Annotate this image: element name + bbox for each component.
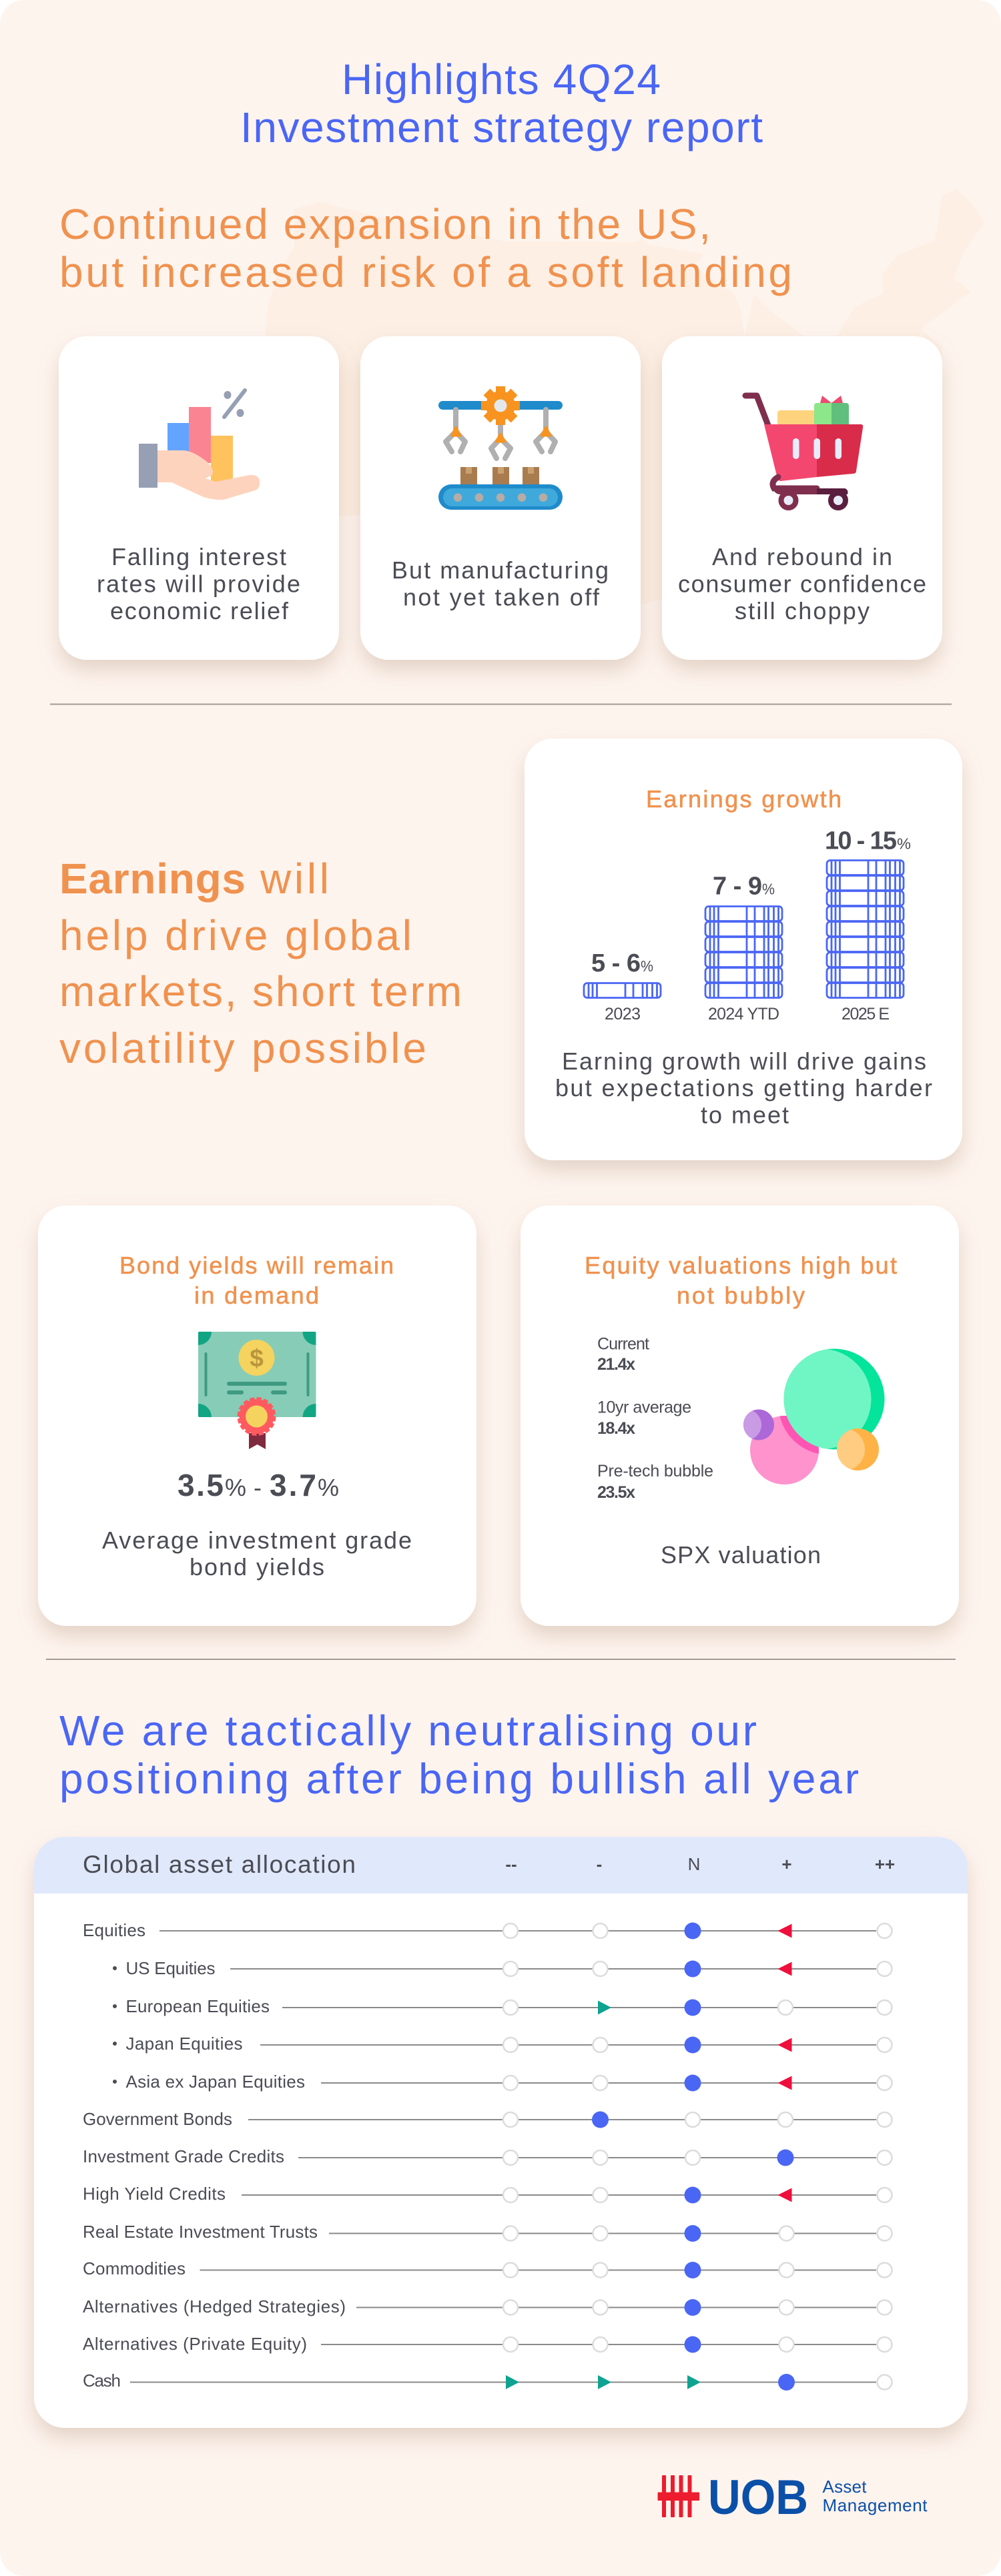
table header: ++ [875,1854,895,1874]
row labels: Government Bonds [83,2109,232,2129]
title [240,55,763,151]
legend: valuation multiples: 10yr average [597,1398,691,1417]
text: average investment grade bond yields [102,1527,412,1581]
text: manufacturing: not yet taken off [403,583,600,611]
row labels: US Equities [125,1958,215,1978]
row labels: Alternatives (Hedged Strategies) [83,2296,346,2316]
row labels: European Equities [125,1996,270,2016]
title: Highlights 4Q24 [342,55,661,103]
bar: 2024 YTD: 7 - 9 [713,873,762,901]
heading: earnings [59,855,462,1072]
legend: valuation multiples: 21.4x [597,1355,635,1374]
text: consumer confidence: still choppy [735,597,870,624]
panel heading: not bubbly [677,1282,805,1309]
heading: earnings: help drive global [59,911,412,959]
table header: - [597,1854,602,1874]
row labels: Commodities [83,2258,186,2278]
panel: consumer confidence [662,336,942,660]
table header: + [781,1854,792,1874]
background map: United States silhouette [266,189,985,604]
row labels: Cash [83,2371,121,2391]
value: 3.5% - 3.7% [178,1468,339,1502]
bar: 2024 YTD [705,873,782,1023]
panel heading [119,1252,394,1309]
table header: Global asset allocation [83,1851,356,1878]
panel: falling interest rates [59,336,339,660]
row labels: Real Estate Investment Trusts [83,2222,318,2242]
row labels: Asia ex Japan Equities [125,2072,305,2092]
bar: 2024 YTD: 2024 YTD [708,1005,779,1023]
value: 3.5% - 3.7%: % [225,1474,246,1501]
logo: UOB Asset Management: Management [822,2495,928,2515]
value: 3.5% - 3.7%: - [254,1474,262,1501]
text: falling interest rates: Falling interest [111,543,286,570]
chart: stacked coins [584,827,911,1023]
heading: US expansion: Continued expansion in the US, [59,200,711,248]
icon: hand holding bar chart [139,390,260,500]
bar: 2025 E: 2025 E [842,1005,890,1023]
heading: tactically neutralising: positioning after being bullish all year [59,1755,859,1803]
heading: earnings: markets, short term [59,967,462,1015]
text: earnings description: Earning growth will drive gains [562,1047,926,1075]
row labels: High Yield Credits [83,2184,226,2204]
panel heading: Equity valuations high but [585,1252,897,1279]
text: earnings description [555,1047,932,1129]
value: 3.5% - 3.7%: % [318,1474,339,1501]
panel: manufacturing [360,336,641,660]
heading: US expansion: but increased risk of a soft landing [59,248,792,296]
row labels: Japan Equities [125,2034,243,2054]
bar: 2023: 2023 [605,1005,641,1023]
heading: earnings: Earnings [59,855,246,903]
text: falling interest rates [97,543,300,624]
heading: earnings: will [260,855,329,903]
table header: -- [505,1854,517,1874]
text: earnings description: but expectations getting harder [555,1074,932,1102]
text: earnings description: to meet [701,1101,789,1129]
legend: valuation multiples [597,1334,713,1502]
value: 3.5% - 3.7%: 3.7 [270,1468,316,1502]
text: falling interest rates: rates will provide [97,570,300,598]
legend: valuation multiples: Current [597,1334,649,1353]
title: Investment strategy report [240,103,763,151]
row labels: Equities [83,1920,145,1940]
panel heading: Earnings growth [646,785,842,813]
table header [34,1837,968,1893]
bar: 2023: 5 - 6 [591,949,641,977]
value: 3.5% - 3.7%: 3.5 [178,1468,224,1502]
text: average investment grade bond yields: Average investment grade [102,1527,412,1554]
icon: bond certificate: $ [250,1344,264,1372]
text: manufacturing: But manufacturing [392,556,609,584]
panel: global asset allocation [34,1837,968,2428]
text: consumer confidence: And rebound in [712,543,892,570]
heading: tactically neutralising: We are tactically neutralising our [59,1707,757,1755]
bar: 2024 YTD: % [762,881,775,898]
text: consumer confidence [678,543,926,624]
bar: 2025 E: 10 - 15 [825,827,897,855]
logo: UOB Asset Management: Asset [822,2477,867,2497]
panel: equity valuations [521,1206,959,1626]
icon: shopping cart [745,396,863,508]
text: consumer confidence: consumer confidence [678,570,926,598]
legend: valuation multiples: 18.4x [597,1419,635,1438]
bar: 2025 E [825,827,911,1023]
bar: 2025 E: % [897,835,911,853]
panel: earnings growth [525,739,962,1160]
panel: bond yields [38,1206,476,1626]
heading: earnings: volatility possible [59,1024,426,1072]
legend: valuation multiples: 23.5x [597,1483,635,1502]
panel heading [585,1252,897,1309]
panel heading: Bond yields will remain [119,1252,394,1279]
icon: factory robot arms and conveyor [438,386,563,510]
row labels: Investment Grade Credits [83,2146,284,2166]
logo: UOB Asset Management [658,2471,928,2525]
panel heading: in demand [194,1282,319,1309]
heading: US expansion [59,200,792,296]
logo: UOB Asset Management: UOB [708,2471,808,2525]
legend: valuation multiples: Pre-tech bubble [597,1462,713,1480]
row labels [83,1920,346,2391]
row labels: Alternatives (Private Equity) [83,2334,307,2354]
text: falling interest rates: economic relief [110,597,289,624]
bar: 2023: % [641,957,653,975]
chart: valuation bubbles [731,1349,885,1484]
text: SPX valuation: SPX valuation [661,1541,821,1569]
text: manufacturing [392,556,609,611]
table header: N [688,1854,700,1874]
text: average investment grade bond yields: bond yields [190,1553,324,1581]
bar: 2023 [584,949,661,1023]
icon: bond certificate [198,1332,316,1449]
heading: tactically neutralising [59,1707,859,1803]
